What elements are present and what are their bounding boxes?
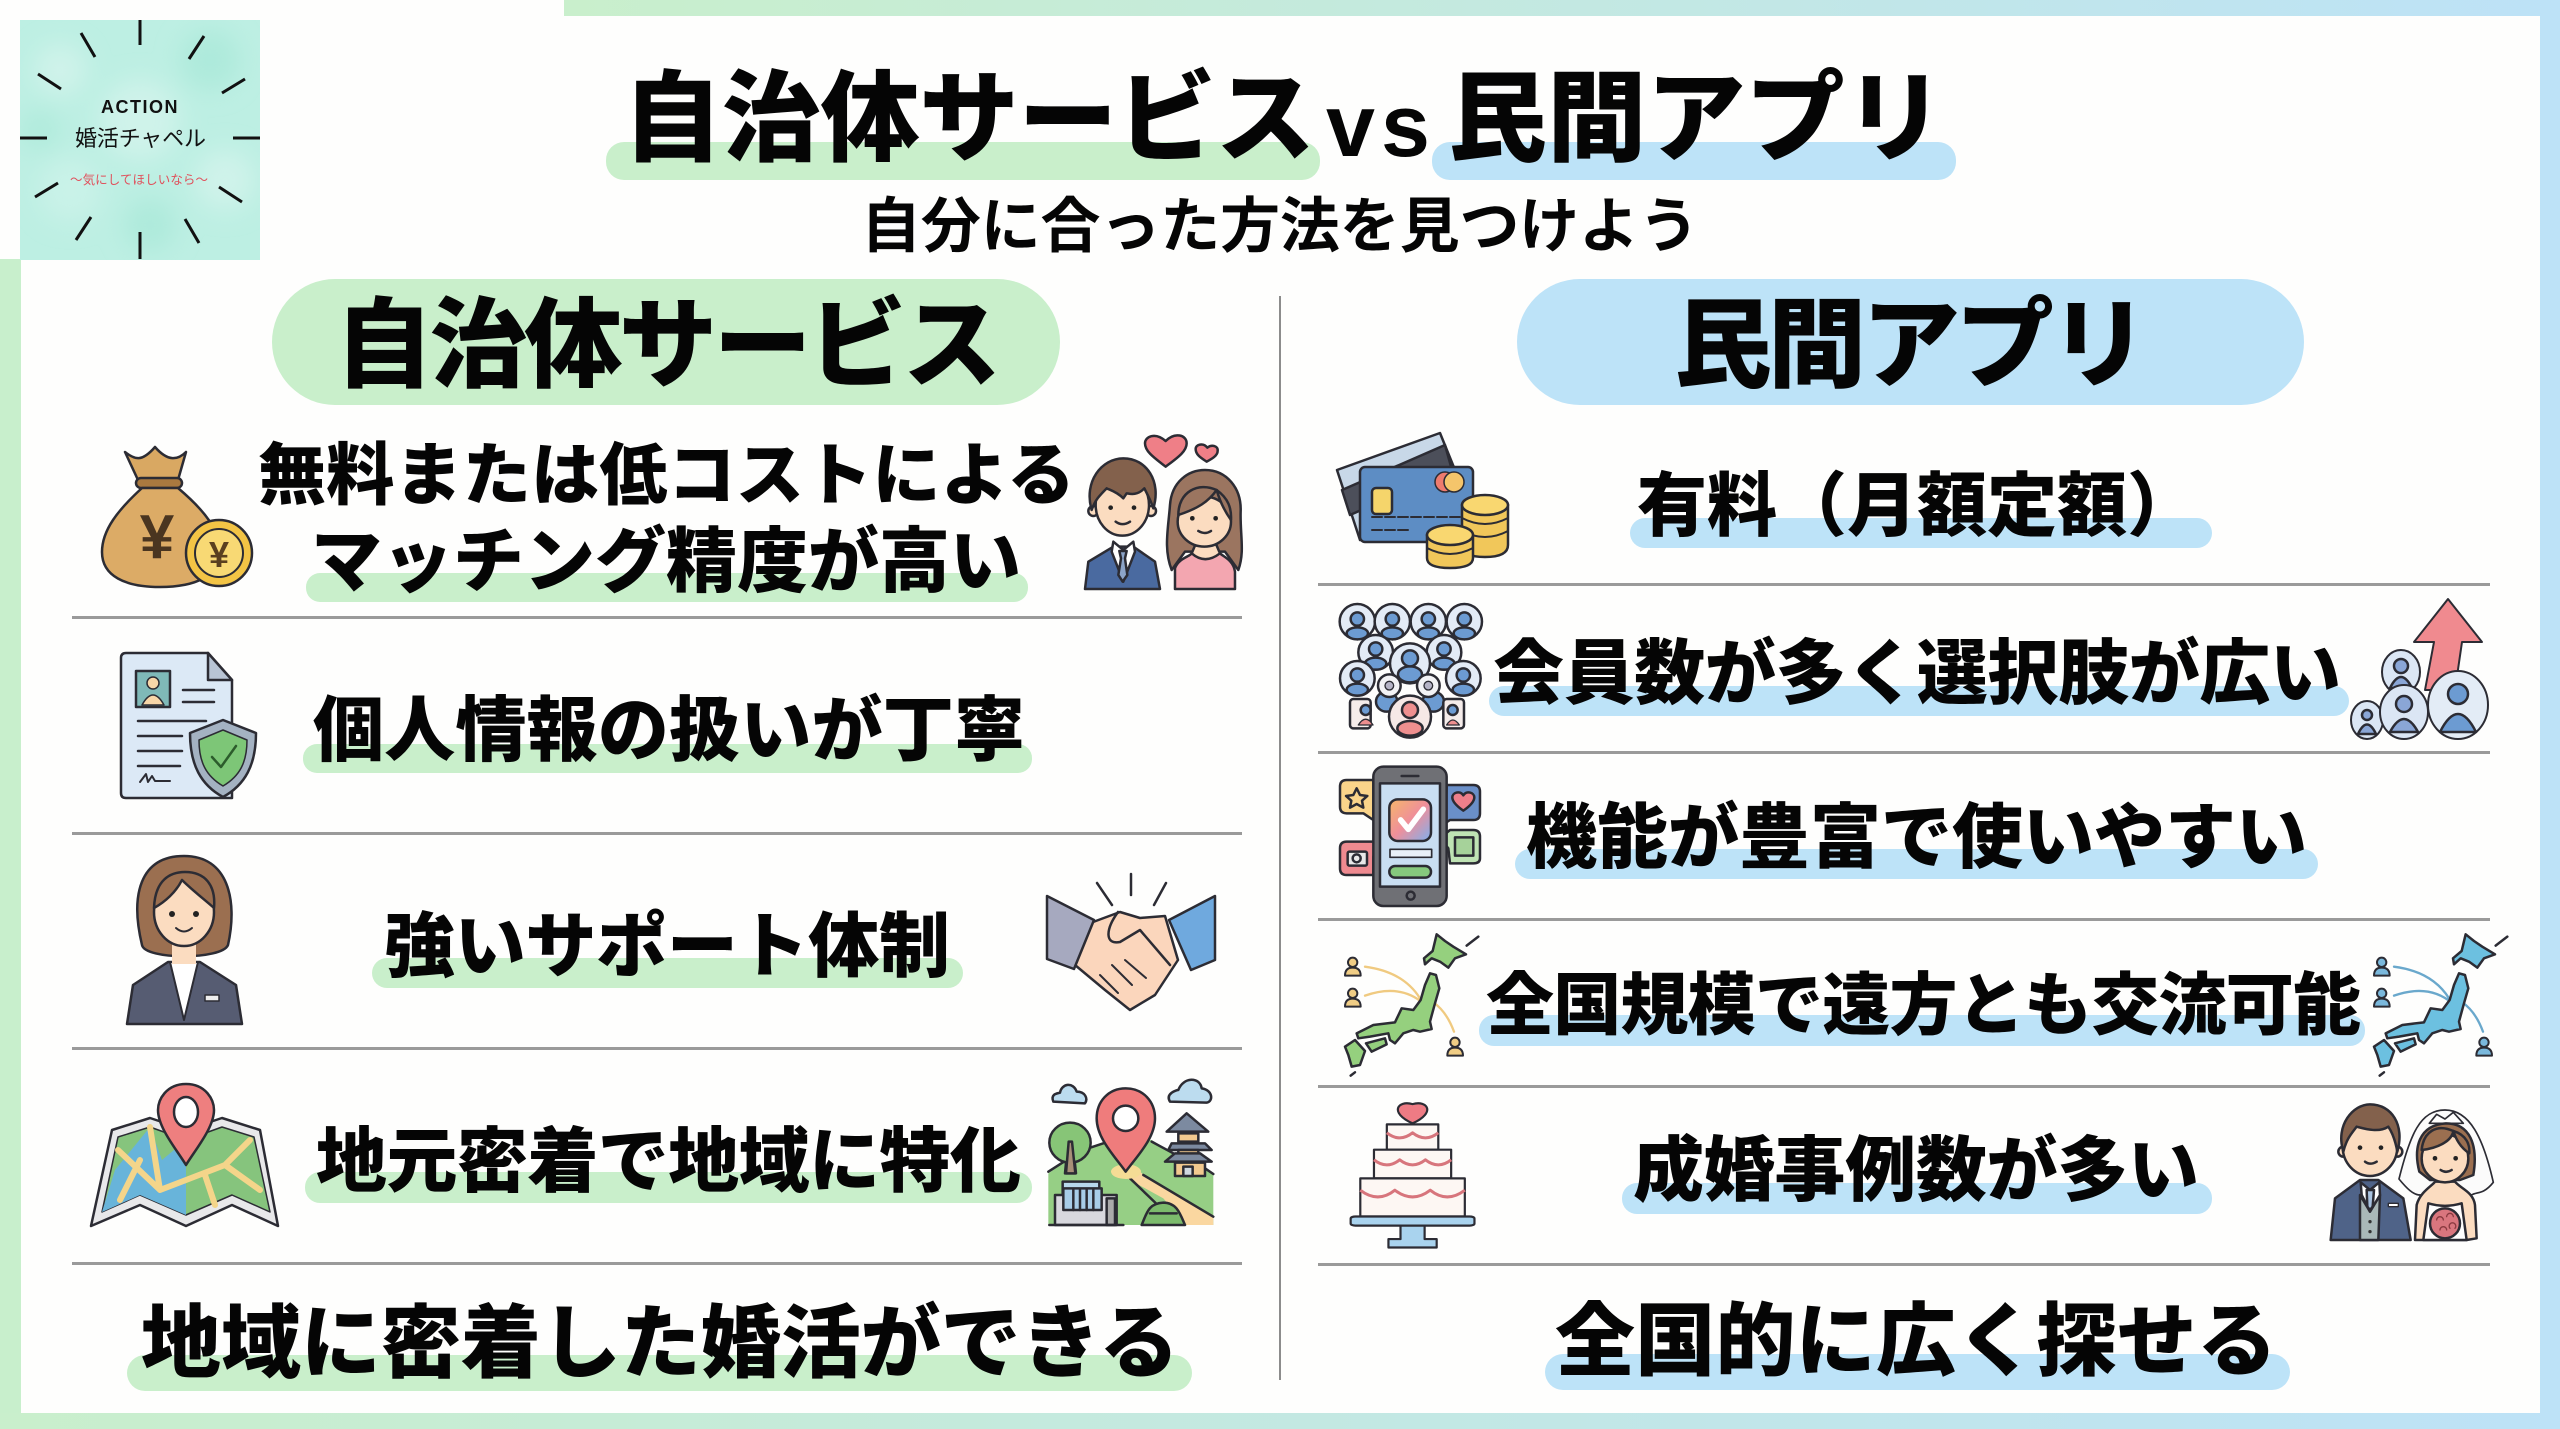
icon: local town scenery — [1048, 1080, 1213, 1225]
frame: right band — [2540, 0, 2560, 1429]
icon: female staff — [127, 856, 242, 1024]
icon: smartphone with app bubbles — [1340, 767, 1480, 906]
icon: couple with hearts — [1085, 435, 1242, 589]
panel: 自治体サービス column — [72, 279, 1242, 1391]
row: 有料: 有料（月額定額） — [1637, 467, 2197, 545]
row: 無料または低コスト — [258, 438, 1075, 602]
icon: Japan map green — [1345, 934, 1478, 1076]
column divider — [1279, 296, 1281, 1380]
panel: 民間アプリ column — [1318, 279, 2507, 1390]
row: 全国規模: 全国規模で遠方とも交流可能 — [1486, 968, 2361, 1044]
icon: Japan map blue — [2374, 934, 2507, 1076]
title: 自治体サービス — [623, 63, 1315, 174]
icon: handshake — [1047, 874, 1215, 1010]
icon: money bag — [102, 447, 252, 587]
row: 強いサポート体制: 強いサポート体制 — [384, 908, 950, 987]
row: 成婚事例数: 成婚事例数が多い — [1633, 1132, 2199, 1211]
icon: bride and groom — [2331, 1104, 2493, 1240]
title highlight: green — [606, 142, 1320, 180]
icon: money bag: ¥ — [209, 534, 229, 575]
icon: document with shield — [121, 653, 256, 798]
row: 地元密着: 地元密着で地域に特化 — [316, 1123, 1021, 1202]
row: 会員数: 会員数が多く選択肢が広い — [1493, 635, 2341, 714]
icon: growing members with arrow — [2351, 599, 2488, 739]
logo: ACTION 婚活チャペル: 婚活チャペル — [75, 126, 206, 151]
subtitle: 自分に合った方法を見つけよう — [861, 193, 1699, 260]
title — [623, 63, 1944, 175]
column header pill: 自治体サービス: 自治体サービス — [335, 290, 1001, 400]
dividers right — [1318, 583, 2490, 1266]
icon: credit cards and coins — [1337, 433, 1508, 568]
frame: left band — [0, 259, 21, 1429]
row: 無料または低コスト: 無料または低コストによる — [258, 438, 1075, 514]
title highlight: blue — [1432, 142, 1956, 180]
icon: money bag: ¥ — [140, 503, 175, 572]
dividers left — [72, 616, 1242, 1265]
title: 民間アプリ — [1448, 63, 1944, 174]
logo: ACTION 婚活チャペル: ACTION — [101, 97, 179, 117]
logo: ACTION 婚活チャペル: 〜気にしてほしいなら〜 — [70, 172, 208, 187]
column header pill: 民間アプリ — [1517, 279, 2304, 405]
icon: folded map with pin — [91, 1084, 278, 1226]
conclusion: 地域に密着した婚活ができる: 地域に密着した婚活ができる — [141, 1299, 1179, 1388]
row: 無料または低コスト: マッチング精度が高い — [311, 523, 1021, 602]
title: vs — [1326, 76, 1430, 175]
conclusion: 全国的に広く探せる: 全国的に広く探せる — [1555, 1297, 2277, 1386]
row: 個人情報: 個人情報の扱いが丁寧 — [313, 692, 1025, 771]
logo: ACTION 婚活チャペル — [20, 20, 260, 260]
icon: crowd of members — [1340, 604, 1482, 738]
frame: top band — [564, 0, 2560, 16]
column header pill: 民間アプリ: 民間アプリ — [1674, 290, 2148, 400]
icon: wedding cake — [1351, 1103, 1474, 1248]
frame: bottom band — [0, 1413, 2560, 1429]
row: 機能: 機能が豊富で使いやすい — [1526, 799, 2307, 878]
